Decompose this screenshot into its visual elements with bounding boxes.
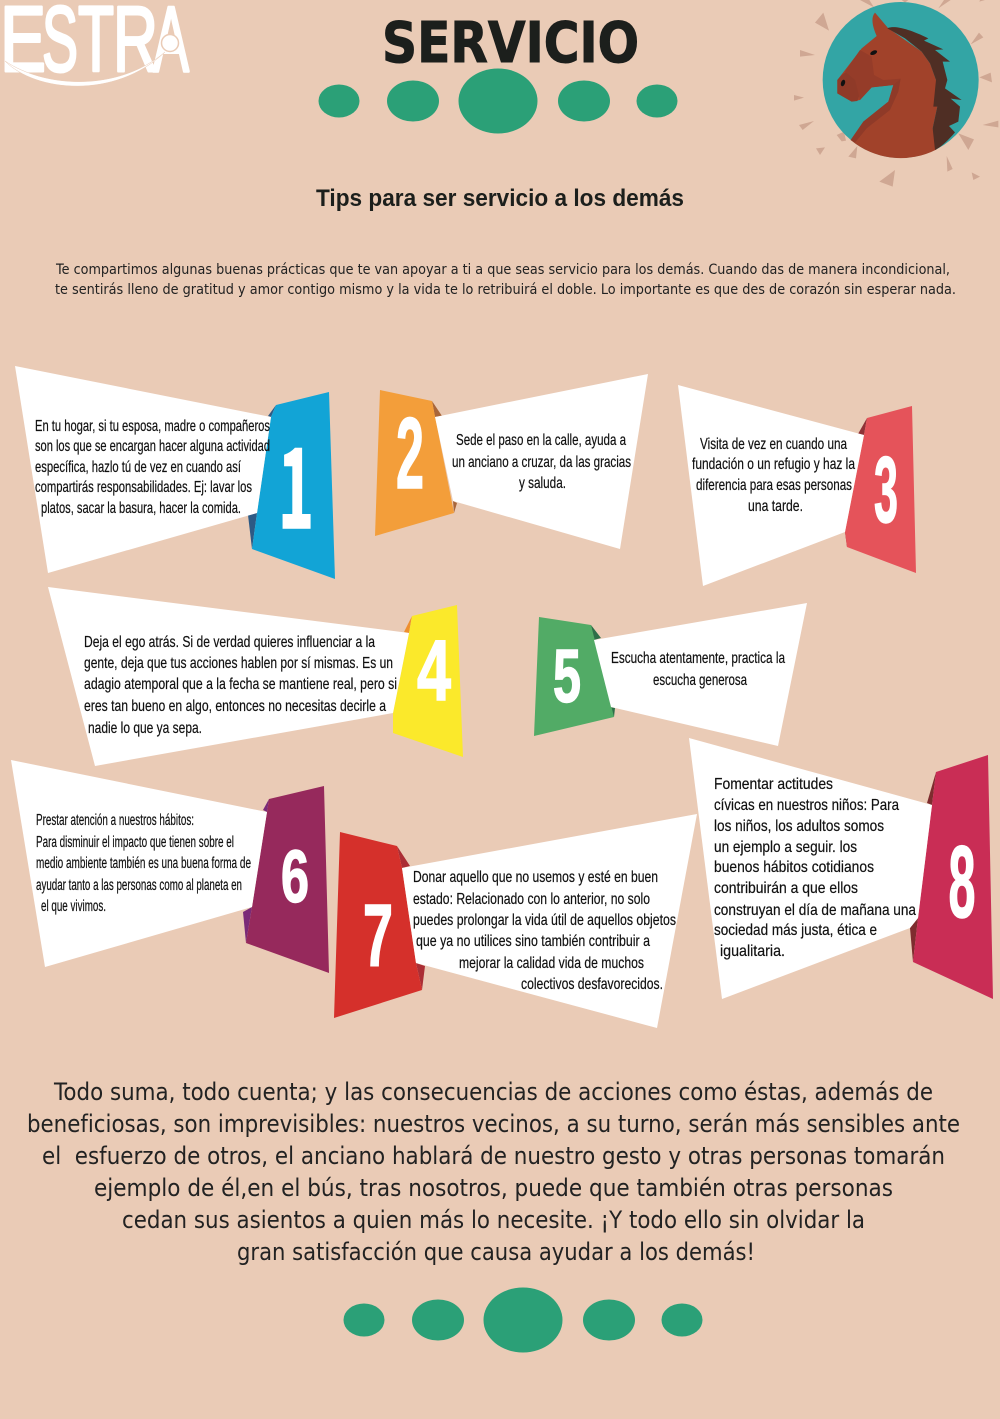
panel: tip 6 [11, 760, 329, 973]
closing text block [27, 1078, 960, 1266]
tip 6 text: el que vivimos. [41, 898, 106, 915]
tip 6 text: medio ambiente también es una buena forma de [36, 855, 251, 872]
tip 1 text: platos, sacar la basura, hacer la comida. [41, 500, 241, 517]
panel: tip 3 [678, 385, 916, 586]
tip 7 text: que ya no utilices sino también contribuir a [416, 933, 650, 950]
tip 8 text: sociedad más justa, ética e [714, 922, 877, 939]
tip 1 text: En tu hogar, si tu esposa, madre o compañeros [35, 418, 270, 435]
panel: tip 8 [689, 738, 993, 999]
tip 4 text: gente, deja que tus acciones hablen por sí mismas. Es un [84, 655, 393, 672]
panel: tip 1 [15, 366, 335, 579]
tip 4 text [84, 634, 397, 737]
tip 3 text: diferencia para esas personas [696, 477, 852, 494]
tip 8 text: Fomentar actitudes [714, 776, 833, 793]
number 6: 6 [281, 835, 309, 918]
closing text block: gran satisfacción que causa ayudar a los demás! [237, 1238, 755, 1266]
tip 3 text [692, 436, 855, 515]
tip 7 text: Donar aquello que no usemos y esté en buen [413, 869, 658, 886]
tip 6 text: Para disminuir el impacto que tienen sobre el [36, 834, 234, 851]
panel: tip 7 [334, 814, 697, 1028]
panel: tip 4 [48, 587, 463, 766]
tip 3 text: fundación o un refugio y haz la [692, 456, 855, 473]
tip 2 text [452, 432, 631, 492]
top decorative green dots [318, 68, 678, 134]
tip 2 text: y saluda. [519, 475, 566, 492]
tip 7 text: mejorar la calidad vida de muchos [459, 955, 644, 972]
closing text block: cedan sus asientos a quien más lo necesite. ¡Y todo ello sin olvidar la [122, 1206, 865, 1234]
tip 7 text: estado: Relacionado con lo anterior, no solo [413, 891, 650, 908]
tip 6 text [36, 812, 251, 915]
bottom decorative green dots [344, 1288, 702, 1352]
panel: tip 2: 2 [396, 398, 424, 510]
tip 3 text: una tarde. [748, 498, 803, 515]
panel: tip 5 [534, 603, 807, 746]
panel: tip 2 [375, 374, 648, 549]
tip 2 text: Sede el paso en la calle, ayuda a [456, 432, 626, 449]
tip 6 text: Prestar atención a nuestros hábitos: [36, 812, 194, 829]
number 7: 7 [363, 886, 393, 985]
tip 8 text: igualitaria. [720, 943, 785, 960]
logo: ESTRA [0, 0, 189, 91]
tip 6 text: ayudar tanto a las personas como al planeta en [36, 877, 242, 894]
tip 5 text: Escucha atentamente, practica la [611, 650, 785, 667]
icon: horse medallion [794, 0, 998, 187]
tip 2 text: un anciano a cruzar, da las gracias [452, 454, 631, 471]
tip 8 text: los niños, los adultos somos [714, 818, 884, 835]
tip 4 text: nadie lo que ya sepa. [88, 720, 202, 737]
tip 7 text: colectivos desfavorecidos. [521, 976, 663, 993]
number 4: 4 [417, 623, 451, 719]
tip 7 text [413, 869, 676, 993]
subtitle: Tips para ser servicio a los demás [316, 185, 684, 212]
tip 8 text: buenos hábitos cotidianos [714, 859, 874, 876]
number 5: 5 [553, 634, 581, 718]
tip 1 text: compartirás responsabilidades. Ej: lavar los [35, 479, 252, 496]
tip 7 text: puedes prolongar la vida útil de aquellos objetos [413, 912, 676, 929]
tip 5 text [611, 650, 785, 689]
tip 4 text: Deja el ego atrás. Si de verdad quieres influenciar a la [84, 634, 375, 651]
tip 3 text: Visita de vez en cuando una [700, 436, 847, 453]
tip 1 text: son los que se encargan hacer alguna actividad [35, 438, 270, 455]
tip 8 text: un ejemplo a seguir. los [714, 839, 857, 856]
title: SERVICIO [382, 11, 639, 76]
intro text [55, 262, 956, 298]
tip 4 text: eres tan bueno en algo, entonces no necesitas decirle a [84, 698, 386, 715]
tip 8 text: construyan el día de mañana una [714, 902, 916, 919]
tip 1 text: específica, hazlo tú de vez en cuando así [35, 459, 241, 476]
tip 5 text: escucha generosa [653, 672, 747, 689]
closing text block: ejemplo de él,en el bús, tras nosotros, puede que también otras personas [94, 1174, 893, 1202]
panel: tip 3: 3 [874, 437, 898, 542]
tip 1 text [35, 418, 270, 517]
tip 8 text: cívicas en nuestros niños: Para [714, 797, 899, 814]
tip 4 text: adagio atemporal que a la fecha se mantiene real, pero si [84, 676, 397, 693]
tip 8 text [714, 776, 916, 960]
number 1: 1 [278, 400, 314, 560]
tip 8 text: contribuirán a que ellos [714, 880, 858, 897]
